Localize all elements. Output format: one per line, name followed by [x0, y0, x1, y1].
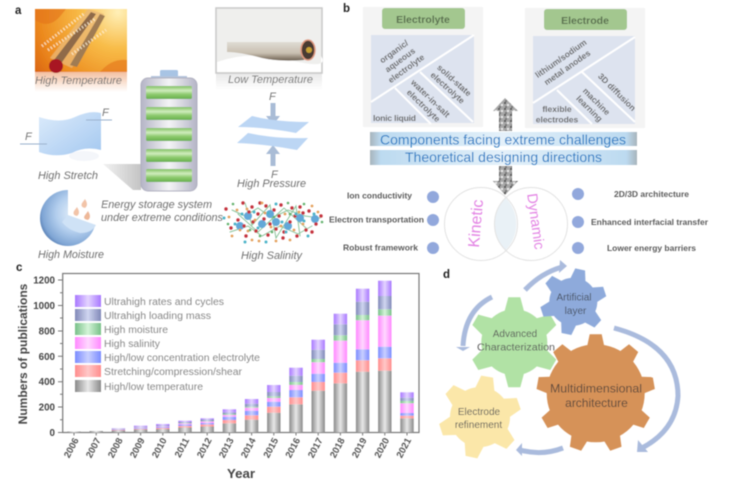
- gear: Multidimensional architecture: Multidimensional: [550, 382, 642, 396]
- venn diagram: kinetic and dynamic: [444, 188, 568, 260]
- label: Kinetic: Kinetic: [466, 199, 487, 248]
- dynamic factors list: Lower energy barriers: [607, 243, 696, 253]
- icon: stretched sheet: [20, 107, 112, 161]
- legend: High moisture: [104, 325, 169, 336]
- segment: solid-state electrolyte: solid-state: [435, 62, 474, 98]
- x axis labels: 2021: [395, 436, 414, 460]
- label: High Temperature: High Temperature: [35, 75, 122, 87]
- cycle arrows: [456, 260, 678, 456]
- legend: Ultrahigh rates and cycles: [104, 297, 224, 308]
- gear: Artificial layer: Artificial: [556, 293, 592, 304]
- x axis labels: 2008: [106, 436, 126, 460]
- legend: [75, 295, 261, 393]
- panel a: energy storage system under extreme conditions: [15, 5, 323, 262]
- icon: stretched sheet: F: [25, 131, 33, 143]
- segment: lithium/sodium metal anodes: lithium/sodium: [533, 37, 589, 80]
- legend: Stretching/compression/shear: [104, 367, 243, 378]
- panel letter d: d: [443, 269, 450, 281]
- y axis title: Numbers of publications: [16, 283, 30, 424]
- x axis labels: 2020: [373, 436, 392, 460]
- dynamic factors list: Enhanced interfacial transfer: [591, 217, 709, 227]
- label: High Stretch: High Stretch: [38, 170, 98, 182]
- panel d: gears: [438, 260, 678, 459]
- card: electrolyte: [363, 7, 483, 127]
- plot frame and ticks: [58, 274, 419, 436]
- segment: lithium/sodium metal anodes: metal anodes: [542, 48, 592, 87]
- kinetic factors list: Electron transportation: [329, 214, 424, 224]
- x axis labels: 2006: [62, 436, 82, 460]
- icon: moisture sphere with droplets: [40, 184, 103, 246]
- segment: organic/aqueous electrolyte: electrolyte: [386, 52, 427, 85]
- gear: Advanced Characterization: Characterization: [477, 343, 555, 354]
- panel letter b: b: [343, 3, 350, 15]
- image: high temperature thermometer: [35, 9, 127, 92]
- gear: Electrode refinement: [438, 375, 522, 459]
- y axis labels: 200: [39, 402, 56, 414]
- band: theoretical designing directions: Theoretical designing directions: [405, 149, 602, 165]
- segment: machine learning: machine: [581, 86, 612, 117]
- segment: flexible electrodes: [536, 104, 579, 124]
- panel b: design directions: [329, 3, 709, 260]
- gear: Electrode refinement: Electrode: [458, 407, 501, 418]
- kinetic factors list: Ion conductivity: [347, 190, 412, 200]
- segment: organic/aqueous electrolyte: aqueous: [383, 46, 417, 74]
- legend: High salinity: [104, 339, 160, 350]
- icon: stretched sheet: F: [102, 107, 110, 119]
- segment: solid-state electrolyte: [429, 62, 474, 106]
- x axis labels: 2010: [150, 436, 170, 460]
- y axis labels: 800: [39, 326, 56, 338]
- dynamic factors list: [572, 188, 709, 254]
- gear: Electrode refinement: refinement: [455, 420, 502, 431]
- x axis labels: 2012: [195, 436, 215, 460]
- x axis labels: 2014: [239, 436, 259, 460]
- x axis labels: [62, 436, 414, 460]
- band: components facing extreme challenges: Components facing extreme challenges: [380, 131, 626, 147]
- dynamic factors list: 2D/3D architecture: [614, 189, 689, 199]
- x axis labels: 2009: [128, 436, 148, 460]
- legend: Ultrahigh loading mass: [104, 311, 211, 322]
- gear: Artificial layer: layer: [565, 306, 587, 317]
- x axis labels: 2007: [84, 436, 104, 460]
- y axis labels: [33, 276, 56, 439]
- segment: water-in-salt electrolyte: electrolyte: [405, 87, 442, 124]
- central caption: Energy storage system: [101, 199, 212, 211]
- icon: battery: [103, 70, 197, 191]
- central caption: under extreme conditions: [101, 212, 224, 224]
- icon: salinity molecular scatter: [224, 203, 322, 242]
- segment: organic/aqueous electrolyte: organic/: [378, 37, 411, 65]
- arrow: up: [493, 98, 518, 131]
- label: High Salinity: High Salinity: [241, 250, 303, 262]
- gear: Multidimensional architecture: [536, 334, 655, 452]
- x axis labels: 2013: [217, 436, 237, 460]
- label: High Moisture: High Moisture: [38, 249, 104, 261]
- panel letter c: c: [16, 262, 23, 274]
- icon: compressed sheets under pressure: [237, 91, 309, 181]
- y axis labels: 0: [50, 428, 56, 439]
- gear: Advanced Characterization: Advanced: [493, 329, 537, 340]
- x axis labels: 2018: [328, 436, 348, 460]
- panel letter a: a: [15, 5, 22, 17]
- arrow: down: [493, 166, 518, 195]
- y axis labels: 1000: [33, 301, 56, 312]
- y axis labels: 1200: [33, 276, 56, 286]
- x axis title: Year: [227, 467, 255, 481]
- segment: flexible electrodes: flexible: [542, 104, 572, 114]
- x axis labels: 2011: [173, 436, 192, 460]
- label: Low Temperature: Low Temperature: [228, 74, 313, 86]
- legend: High/low temperature: [104, 382, 204, 393]
- label: High Pressure: High Pressure: [237, 178, 306, 190]
- y axis labels: 600: [39, 352, 56, 363]
- gear: Multidimensional architecture: architecture: [565, 396, 628, 410]
- segment: machine learning: [574, 86, 612, 124]
- image: low temperature cable in snow: [216, 8, 323, 90]
- panel c: publications stacked bar chart: [16, 262, 419, 481]
- legend: High/low concentration electrolyte: [104, 353, 261, 364]
- gear: Artificial layer: [539, 268, 607, 336]
- kinetic factors list: Robust framework: [343, 242, 418, 252]
- icon: compressed sheets under pressure: F: [271, 169, 279, 181]
- segment: flexible electrodes: electrodes: [536, 114, 579, 124]
- header: Electrode: Electrode: [561, 15, 609, 27]
- segment: machine learning: learning: [574, 93, 605, 124]
- label: Dynamic: Dynamic: [523, 192, 547, 250]
- kinetic factors list: [329, 190, 439, 254]
- card: electrode: [525, 8, 645, 128]
- segment: organic/aqueous electrolyte: [374, 35, 427, 85]
- gear: Advanced Characterization: [470, 297, 558, 387]
- y axis labels: 400: [39, 377, 56, 388]
- x axis labels: 2015: [262, 436, 281, 460]
- icon: compressed sheets under pressure: F: [269, 91, 277, 103]
- segment: 3D diffusion: 3D diffusion: [596, 71, 638, 113]
- header: Electrolyte: Electrolyte: [396, 14, 450, 26]
- segment: Ionic liquid: Ionic liquid: [373, 113, 416, 123]
- segment: solid-state electrolyte: electrolyte: [429, 70, 467, 106]
- segment: water-in-salt electrolyte: water-in-salt: [408, 77, 452, 120]
- x axis labels: 2016: [284, 436, 303, 460]
- x axis labels: 2019: [350, 436, 370, 460]
- x axis labels: 2017: [306, 436, 326, 460]
- central caption: [101, 199, 224, 224]
- stacked bars by year: [67, 281, 414, 432]
